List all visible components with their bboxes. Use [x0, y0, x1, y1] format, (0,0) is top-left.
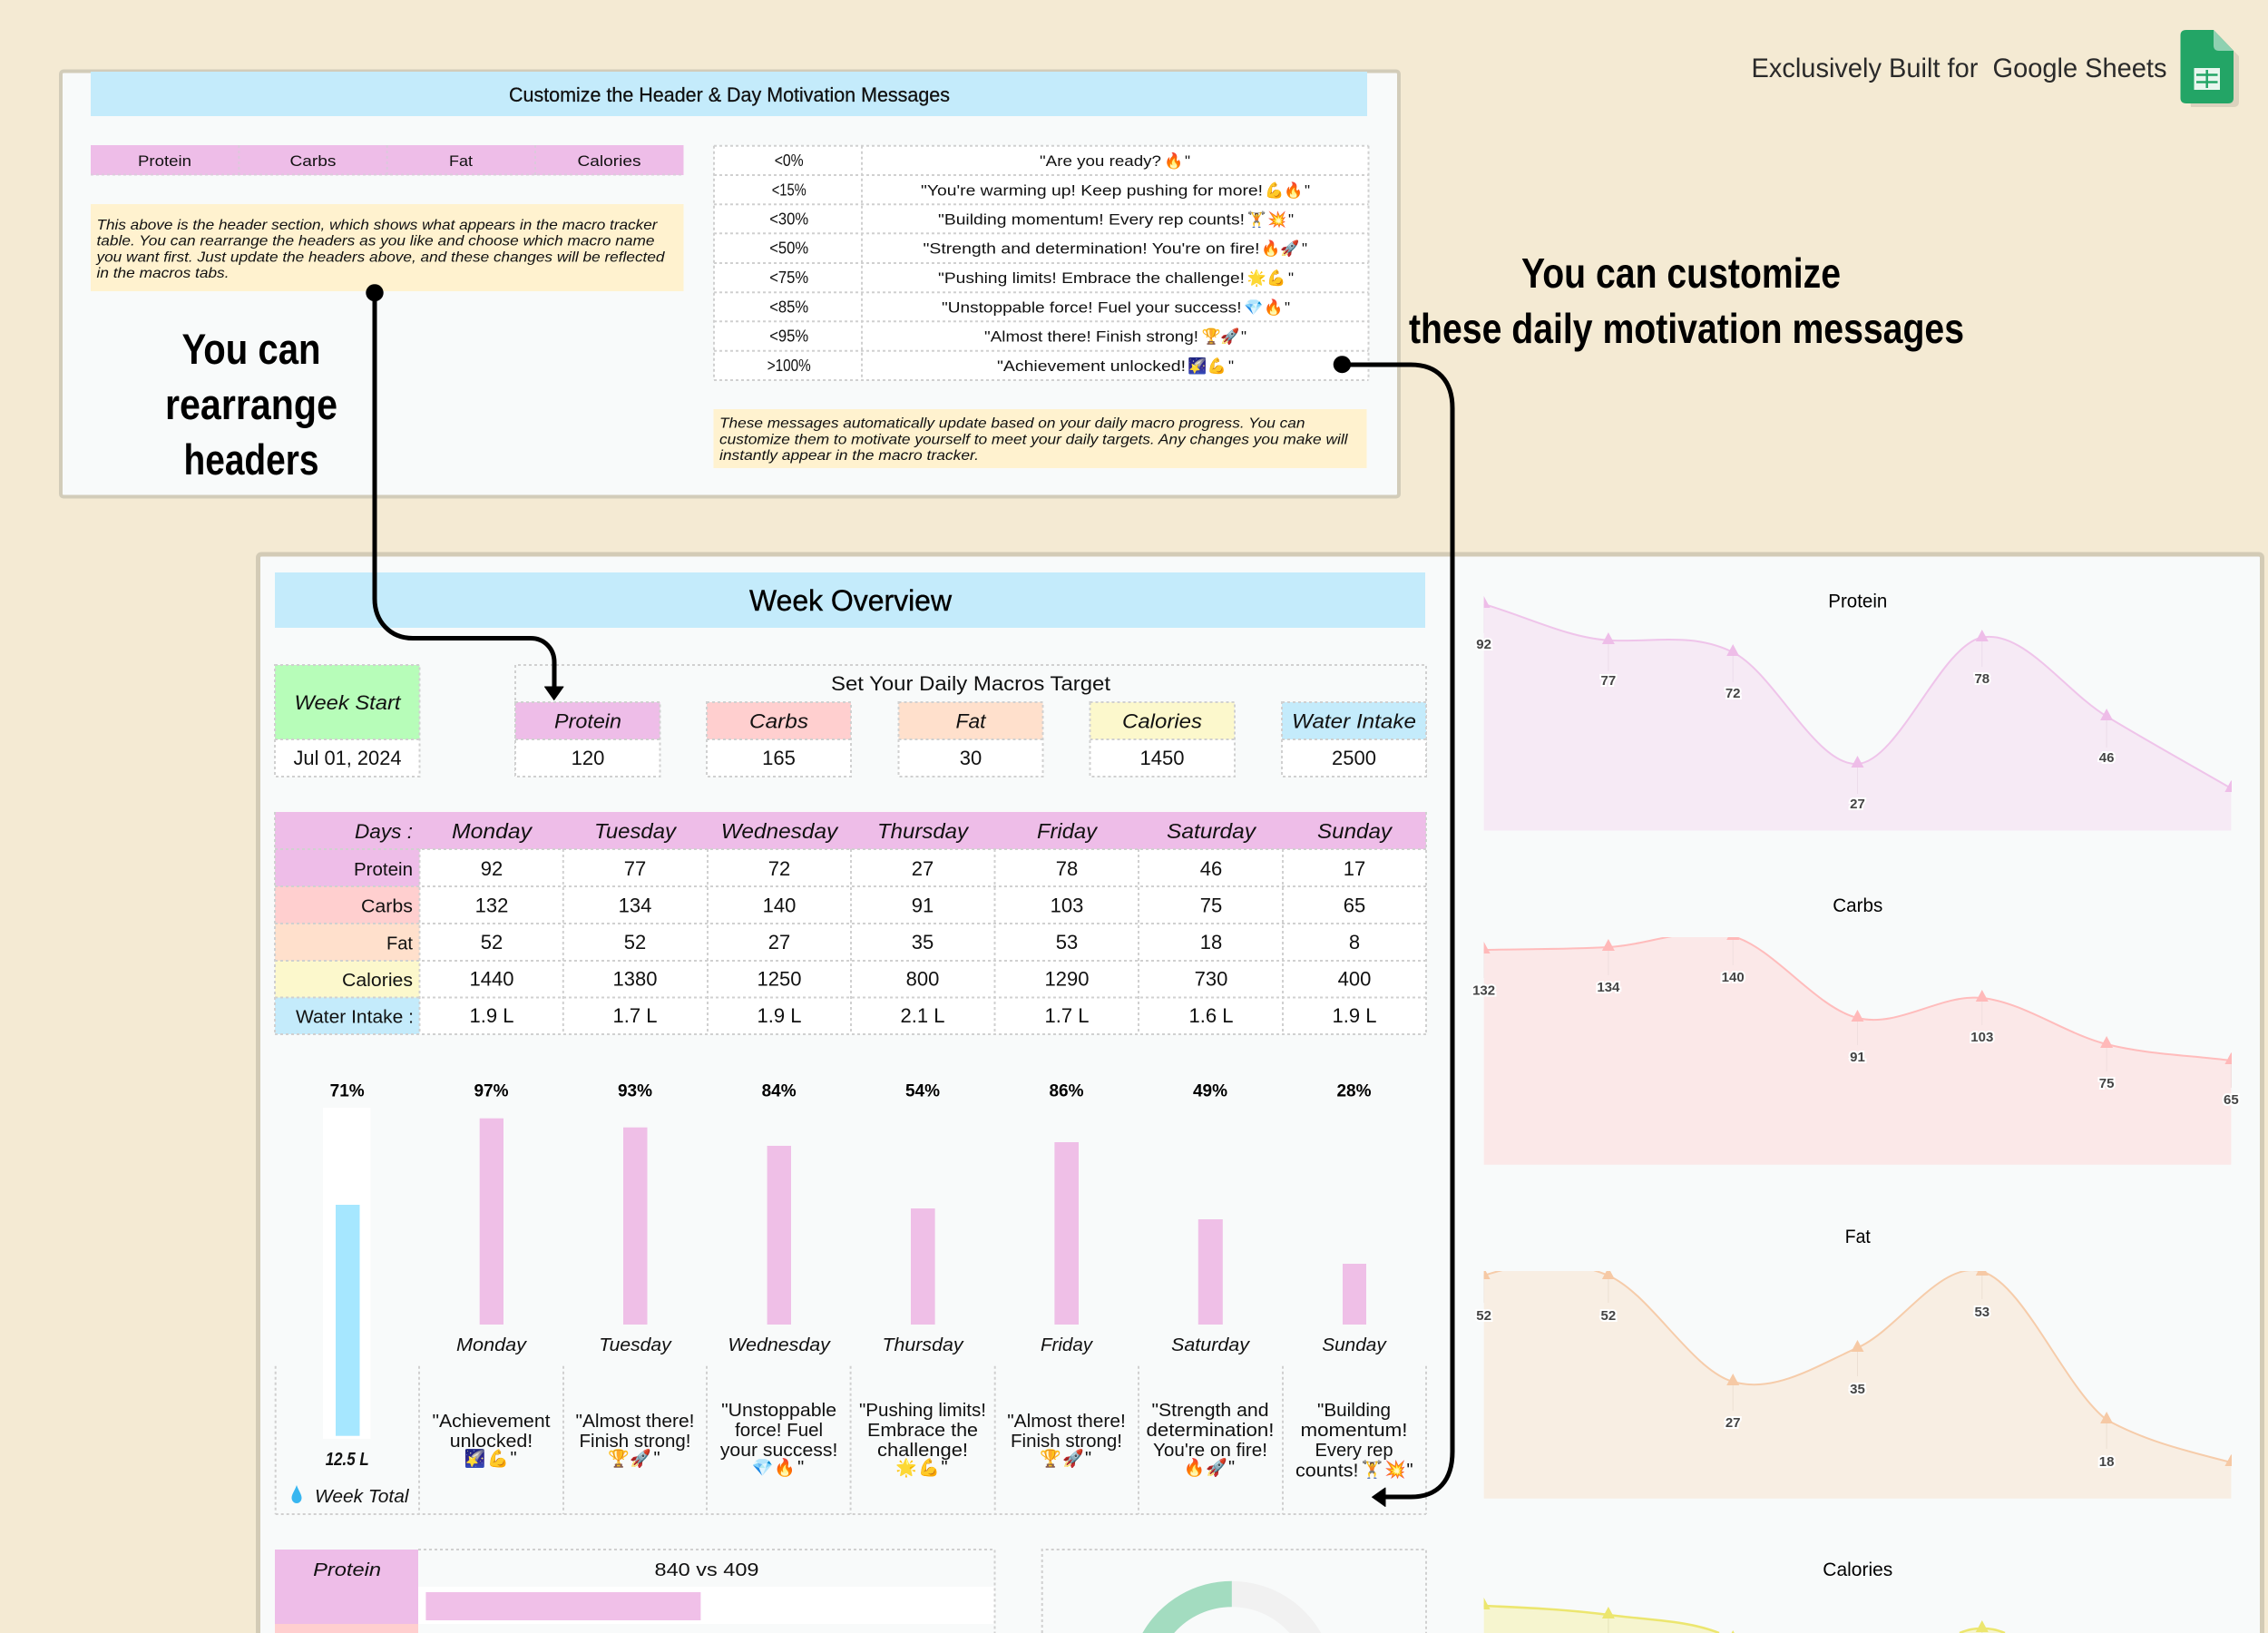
weekly macros table: 1380	[613, 967, 657, 991]
chart: protein: 77	[1601, 673, 1616, 689]
weekly protein progress	[275, 1550, 994, 1633]
daily progress bar chart: Monday	[456, 1335, 527, 1355]
daily progress bar chart: Sunday	[1322, 1335, 1387, 1355]
macro header row: Carbs	[290, 152, 336, 170]
chart: calories: Calories	[1823, 1560, 1892, 1580]
motivation messages table: <75%	[769, 269, 808, 287]
message: thursday: "	[941, 1458, 948, 1478]
daily progress bar chart: Tuesday	[599, 1335, 672, 1355]
daily progress bar chart: 84%	[762, 1082, 797, 1101]
note: messages explanation	[713, 409, 1366, 468]
weekly macros table: 18	[1200, 931, 1222, 953]
motivation messages table: <15%	[772, 181, 807, 199]
chart: fat: 18	[2099, 1454, 2114, 1470]
icon: google sheets	[2181, 30, 2239, 107]
daily macros target	[515, 665, 1426, 777]
daily macros target: Set Your Daily Macros Target	[831, 672, 1110, 695]
chart: carbs: Carbs	[1833, 895, 1882, 916]
chart: carbs: 140	[1722, 970, 1745, 985]
weekly macros table: 800	[906, 967, 939, 991]
message: friday	[1007, 1412, 1126, 1469]
weekly macros table: 1.9 L	[470, 1004, 513, 1027]
message: wednesday: "Unstoppable	[721, 1401, 836, 1421]
callout: you can rearrange headers	[165, 325, 337, 484]
weekly macros table: 134	[619, 895, 651, 916]
chart: carbs: 75	[2099, 1076, 2114, 1091]
note: messages explanation: instantly appear in the macro tracker.	[719, 448, 979, 464]
donut chart	[1042, 1550, 1426, 1633]
weekly macros table: 1.7 L	[1045, 1004, 1089, 1027]
weekly macros table: 78	[1056, 857, 1078, 880]
target: fat: Fat	[956, 709, 986, 733]
daily progress bar chart: Friday	[1041, 1335, 1093, 1355]
chart: carbs: 65	[2224, 1092, 2239, 1108]
chart: carbs: 132	[1472, 983, 1495, 998]
chart: carbs	[1472, 895, 2239, 1165]
icon: water drop	[292, 1485, 301, 1503]
weekly macros table	[275, 812, 1426, 1034]
motivation messages table: 🚀	[1220, 327, 1240, 347]
chart: carbs: 103	[1970, 1030, 1993, 1045]
message: wednesday: your success!	[720, 1441, 837, 1461]
weekly macros table: Thursday	[877, 819, 970, 843]
callout: you can customize these daily motivation messages	[1409, 249, 1964, 352]
chart: fat: 52	[1601, 1308, 1616, 1324]
target: calories	[1090, 702, 1235, 777]
chart: protein: Protein	[1828, 592, 1887, 611]
message: thursday: "Pushing limits!	[859, 1401, 986, 1421]
note: header section explanation: This above is the header section, which shows what appears in the macro tracker	[96, 218, 658, 233]
message: tuesday	[575, 1412, 695, 1469]
callout: you can customize these daily motivation messages: You can customize	[1521, 249, 1841, 297]
weekly macros table: Water Intake :	[296, 1007, 414, 1027]
note: header section explanation: in the macros tabs.	[96, 266, 229, 281]
motivation messages table: 💪	[1265, 181, 1285, 200]
weekly macros table: 1.9 L	[758, 1004, 801, 1027]
message: saturday: determination!	[1147, 1421, 1274, 1441]
chart: fat: 53	[1974, 1305, 1989, 1320]
motivation messages table: 💎	[1244, 298, 1264, 317]
motivation messages table: 🔥	[1164, 152, 1184, 171]
message: wednesday: force! Fuel	[735, 1421, 823, 1441]
message: saturday: 🚀	[1206, 1457, 1227, 1478]
message: saturday: 🔥	[1184, 1457, 1206, 1478]
motivation messages table: <50%	[769, 240, 808, 258]
weekly macros table: 8	[1349, 931, 1360, 953]
target: fat	[898, 702, 1043, 777]
callout: you can rearrange headers: rearrange	[165, 380, 337, 428]
weekly macros table: Days :	[355, 820, 413, 843]
message: thursday: challenge!	[877, 1441, 968, 1461]
weekly macros table: 1440	[470, 967, 513, 991]
target: water intake	[1282, 702, 1426, 777]
note: header section explanation: you want first. Just update the headers above, and these changes will be reflected	[95, 249, 666, 265]
motivation messages table: 🏋️	[1247, 210, 1266, 229]
message: tuesday: 🚀	[630, 1448, 651, 1469]
motivation messages table: "Are you ready?	[1040, 152, 1161, 170]
message: tuesday: "Almost there!	[575, 1412, 695, 1432]
motivation messages table: "	[1305, 181, 1310, 199]
message: friday: 🏆	[1040, 1448, 1061, 1469]
arrow: messages table to daily messages	[1334, 356, 1452, 1507]
target: protein: 120	[572, 747, 604, 769]
macro header row: Calories	[577, 152, 640, 170]
target: fat: 30	[960, 747, 982, 769]
motivation messages table: 🌠	[1188, 357, 1207, 376]
week start box: Week Start	[294, 691, 401, 714]
message: wednesday: 💎	[752, 1457, 774, 1478]
macro header row: Protein	[138, 152, 191, 170]
chart: carbs: 134	[1597, 980, 1620, 995]
motivation messages table: "Achievement unlocked!	[997, 357, 1186, 375]
weekly macros table: Friday	[1037, 819, 1099, 843]
motivation messages table: "Pushing limits! Embrace the challenge!	[938, 269, 1245, 287]
note: messages explanation: customize them to motivate yourself to meet your daily targets. Any changes you make will	[719, 432, 1348, 447]
message: saturday: You're on fire!	[1153, 1441, 1267, 1461]
weekly macros table: 91	[912, 895, 934, 916]
week start box: Jul 01, 2024	[294, 747, 401, 769]
message: monday: 💪	[487, 1448, 509, 1469]
motivation messages table: "	[1302, 240, 1307, 258]
chart: carbs: 91	[1850, 1050, 1865, 1065]
weekly protein progress: 840 vs 409	[655, 1560, 758, 1580]
chart: protein: 92	[1476, 637, 1491, 652]
motivation messages table	[714, 146, 1368, 380]
water intake gauge: 12.5 L	[326, 1450, 369, 1470]
message: monday: 🌠	[464, 1448, 486, 1469]
motivation messages table: 💪	[1266, 269, 1286, 288]
target: water intake: Water Intake	[1292, 709, 1416, 733]
weekly macros table: 1.7 L	[613, 1004, 657, 1027]
motivation messages table: <30%	[769, 210, 808, 229]
macro header row	[91, 145, 684, 175]
water intake gauge: Week Total	[315, 1487, 409, 1507]
panel: customize header and messages	[61, 71, 1399, 497]
daily progress bar chart: 86%	[1049, 1082, 1084, 1101]
motivation messages table: 🔥	[1264, 298, 1284, 317]
note: header section explanation: table. You can rearrange the headers as you like and choose which macro name	[96, 234, 655, 249]
weekly macros table: 35	[912, 931, 934, 953]
target: calories: 1450	[1140, 747, 1184, 769]
weekly macros table: 53	[1056, 931, 1078, 953]
motivation messages table: 💪	[1207, 357, 1227, 376]
message: thursday: Embrace the	[867, 1421, 978, 1441]
weekly macros table: 17	[1344, 857, 1365, 880]
chart: fat: 52	[1476, 1308, 1491, 1324]
target: protein	[515, 702, 660, 777]
message: sunday: "	[1406, 1461, 1413, 1481]
motivation messages table: "Almost there! Finish strong!	[984, 328, 1198, 345]
weekly macros table: 140	[763, 895, 796, 916]
motivation messages table: 🔥	[1261, 240, 1281, 259]
note: header section explanation	[91, 204, 684, 291]
motivation messages table: 🌟	[1247, 269, 1266, 288]
weekly macros table: Calories	[342, 971, 413, 991]
daily progress bar chart	[456, 1082, 1387, 1355]
daily motivation messages	[276, 1366, 1426, 1514]
callout: you can customize these daily motivation messages: these daily motivation messages	[1409, 305, 1964, 352]
macro header row: Fat	[449, 152, 473, 170]
motivation messages table: 🚀	[1280, 240, 1300, 259]
weekly macros table: Sunday	[1317, 819, 1393, 843]
message: saturday: "	[1228, 1458, 1235, 1478]
message: wednesday	[720, 1401, 837, 1478]
message: wednesday: "	[797, 1458, 804, 1478]
message: wednesday: 🔥	[774, 1457, 796, 1478]
arrow: headers note to protein target	[366, 284, 563, 700]
weekly macros table: Protein	[354, 860, 413, 880]
weekly macros table: 400	[1338, 967, 1371, 991]
motivation messages table: "Building momentum! Every rep counts!	[938, 210, 1245, 229]
message: sunday: 💥	[1384, 1459, 1406, 1480]
motivation messages table: 🏆	[1202, 327, 1221, 347]
daily progress bar chart: 28%	[1336, 1082, 1372, 1101]
note: messages explanation: These messages automatically update based on your daily macro progress. You can	[719, 416, 1305, 432]
water intake gauge: 71%	[330, 1082, 365, 1101]
chart: fat	[1476, 1227, 2237, 1499]
weekly macros table: 2.1 L	[901, 1004, 944, 1027]
target: carbs: Carbs	[749, 709, 808, 733]
motivation messages table: 💥	[1267, 210, 1287, 229]
callout: you can rearrange headers: headers	[183, 435, 319, 484]
motivation messages table: "	[1288, 210, 1294, 229]
weekly macros table: Saturday	[1167, 819, 1257, 843]
motivation messages table: "Unstoppable force! Fuel your success!	[942, 298, 1241, 316]
weekly macros table: 27	[768, 931, 790, 953]
target: calories: Calories	[1122, 709, 1202, 733]
chart: protein: 78	[1974, 671, 1989, 687]
weekly macros table: 52	[624, 931, 646, 953]
chart: protein: 46	[2099, 750, 2114, 766]
heading: customize	[91, 72, 1367, 116]
target: protein: Protein	[554, 709, 621, 733]
message: monday: unlocked!	[450, 1432, 533, 1452]
weekly macros table: 730	[1195, 967, 1227, 991]
weekly macros table: 77	[624, 857, 646, 880]
chart: protein	[1476, 592, 2237, 831]
chart: protein: 27	[1850, 797, 1865, 812]
message: saturday	[1147, 1401, 1274, 1478]
chart: fat: Fat	[1845, 1227, 1871, 1247]
weekly protein progress: Protein	[313, 1560, 381, 1580]
message: sunday: momentum!	[1301, 1421, 1408, 1441]
motivation messages table: "	[1285, 298, 1290, 316]
message: thursday: 🌟	[895, 1457, 917, 1478]
daily progress bar chart: Wednesday	[728, 1335, 831, 1355]
message: friday: "	[1085, 1449, 1091, 1469]
badge: exclusively built for google sheets	[1751, 30, 2239, 107]
daily progress bar chart: 97%	[474, 1082, 509, 1101]
message: sunday: 🏋️	[1362, 1459, 1383, 1480]
motivation messages table: "You're warming up! Keep pushing for more!	[921, 181, 1263, 199]
weekly macros table: 27	[912, 857, 934, 880]
message: sunday	[1295, 1401, 1413, 1481]
message: monday: "Achievement	[432, 1412, 551, 1432]
target: water intake: 2500	[1332, 747, 1376, 769]
weekly macros table: 92	[481, 857, 503, 880]
chart: calories	[1478, 1560, 2005, 1633]
weekly macros table: 1.6 L	[1189, 1004, 1233, 1027]
weekly macros table: Monday	[452, 819, 533, 843]
message: friday: 🚀	[1062, 1448, 1084, 1469]
daily progress bar chart: 49%	[1193, 1082, 1227, 1101]
weekly macros table: Carbs	[361, 896, 413, 916]
weekly macros table: 103	[1051, 895, 1083, 916]
motivation messages table: "	[1228, 357, 1234, 375]
target: carbs: 165	[762, 747, 796, 769]
message: tuesday: 🏆	[608, 1448, 630, 1469]
message: tuesday: "	[653, 1449, 660, 1469]
message: sunday: counts!	[1295, 1462, 1359, 1481]
badge: exclusively built for google sheets: Exclusively Built for Google Sheets	[1751, 54, 2166, 83]
weekly macros table: 46	[1200, 857, 1222, 880]
motivation messages table: "Strength and determination! You're on fire!	[924, 240, 1259, 258]
heading: week overview: Week Overview	[749, 584, 953, 617]
motivation messages table: "	[1241, 328, 1246, 345]
weekly macros table: 52	[481, 931, 503, 953]
weekly macros table: 65	[1344, 895, 1365, 916]
message: saturday: "Strength and	[1152, 1401, 1268, 1421]
message: sunday: Every rep	[1315, 1441, 1393, 1461]
motivation messages table: "	[1288, 269, 1294, 287]
message: sunday: "Building	[1317, 1401, 1391, 1421]
weekly macros table: 1.9 L	[1333, 1004, 1376, 1027]
heading: week overview	[275, 572, 1425, 628]
weekly macros table: 75	[1200, 895, 1222, 916]
message: thursday	[859, 1401, 986, 1478]
motivation messages table: <85%	[769, 298, 808, 316]
motivation messages table: "	[1185, 152, 1190, 170]
chart: protein: 72	[1725, 686, 1741, 701]
weekly macros table: Fat	[386, 934, 413, 954]
weekly macros table: 72	[768, 857, 790, 880]
weekly macros table: Wednesday	[721, 819, 839, 843]
panel: week overview	[258, 554, 2263, 1633]
message: friday: Finish strong!	[1011, 1432, 1122, 1452]
target: carbs	[707, 702, 851, 777]
daily progress bar chart: Thursday	[882, 1335, 964, 1355]
motivation messages table: <0%	[775, 152, 804, 170]
week start box	[275, 665, 419, 777]
weekly macros table: 1250	[758, 967, 801, 991]
message: monday: "	[510, 1449, 517, 1469]
daily progress bar chart: 54%	[905, 1082, 940, 1101]
weekly macros table: 132	[475, 895, 508, 916]
weekly macros table: Tuesday	[594, 819, 678, 843]
message: monday	[432, 1412, 551, 1469]
chart: fat: 27	[1725, 1415, 1741, 1431]
motivation messages table: >100%	[767, 357, 811, 375]
message: thursday: 💪	[918, 1457, 940, 1478]
daily progress bar chart: 93%	[618, 1082, 652, 1101]
daily progress bar chart: Saturday	[1171, 1335, 1250, 1355]
heading: customize: Customize the Header & Day Motivation Messages	[509, 83, 950, 106]
motivation messages table: 🔥	[1284, 181, 1304, 200]
chart: fat: 35	[1850, 1382, 1865, 1397]
motivation messages table: <95%	[769, 327, 808, 345]
weekly macros table: 1290	[1045, 967, 1089, 991]
callout: you can rearrange headers: You can	[181, 325, 321, 373]
water intake gauge	[292, 1082, 409, 1507]
message: tuesday: Finish strong!	[579, 1432, 691, 1452]
message: friday: "Almost there!	[1007, 1412, 1126, 1432]
